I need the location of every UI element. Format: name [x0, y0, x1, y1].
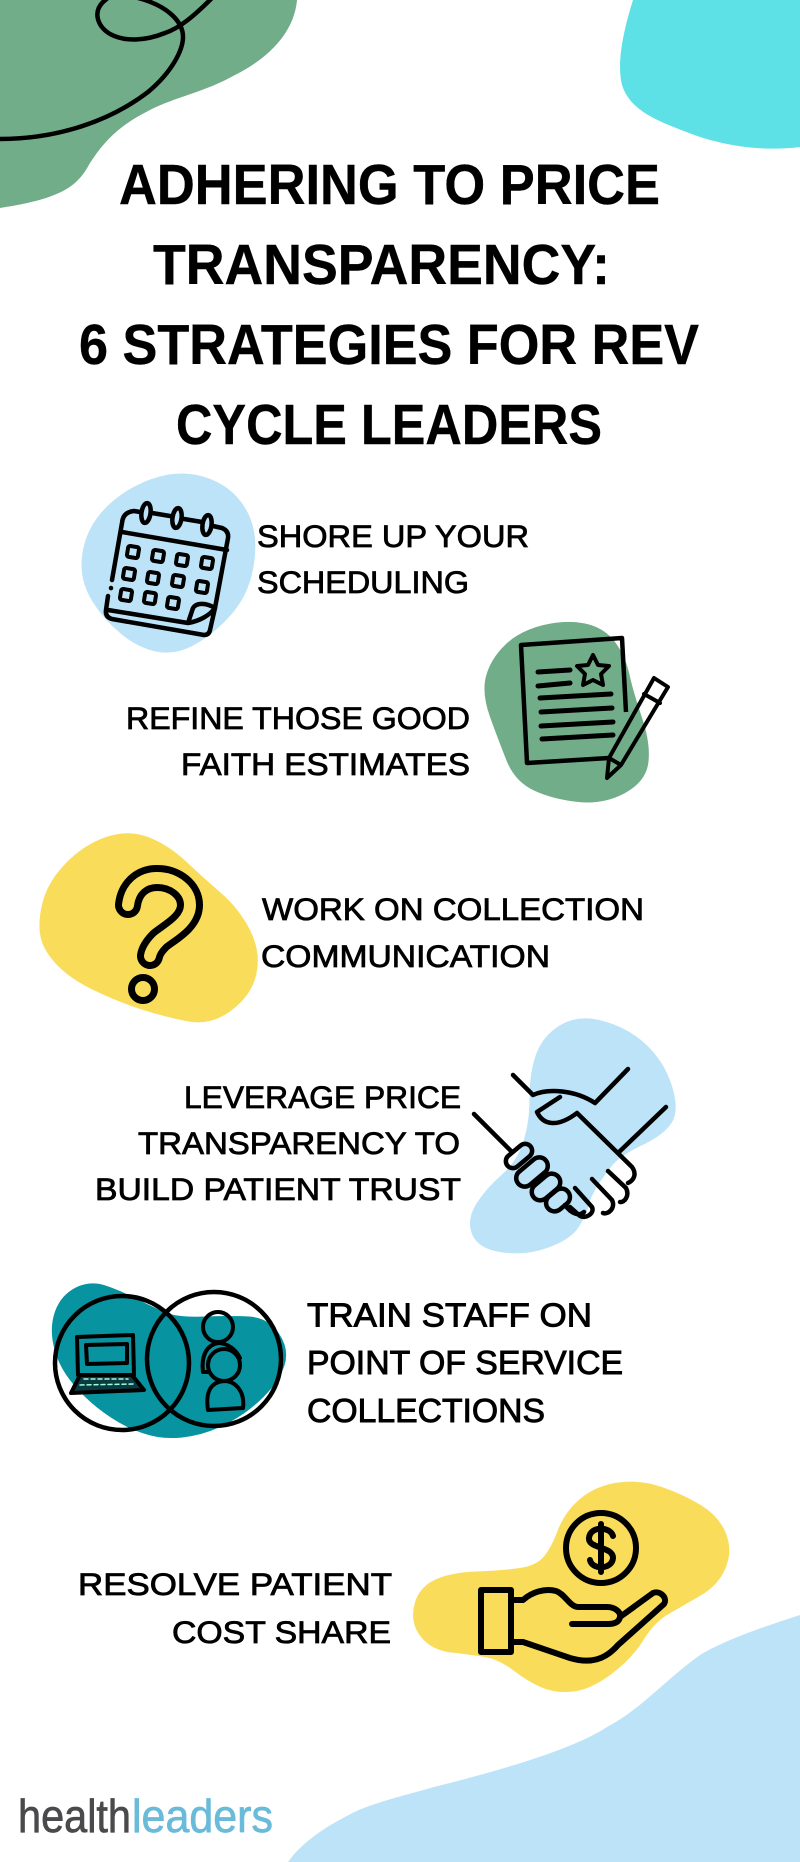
text: leverage price transparency: [95, 1079, 461, 1207]
title: ADHERING TO PRICE: [119, 153, 660, 217]
text: work on collection communication: [261, 891, 644, 974]
text: train staff on point of service collections: [307, 1296, 623, 1429]
logo: healthleaders: [18, 1790, 273, 1842]
icon: document and pencil: [521, 638, 668, 778]
decorative swirl line: [0, 0, 212, 139]
text: train staff on point of service collections: TRAIN STAFF ON: [307, 1296, 592, 1334]
title: 6 STRATEGIES FOR REV: [79, 313, 699, 377]
text: leverage price transparency: BUILD PATIENT TRUST: [95, 1171, 461, 1207]
text: refine those good faith estimates: REFINE THOSE GOOD: [126, 700, 470, 736]
text: resolve patient cost share: COST SHARE: [172, 1614, 391, 1650]
strategy 1: scheduling: [84, 476, 529, 650]
text: leverage price transparency: LEVERAGE PRICE: [184, 1079, 461, 1115]
text: refine those good faith estimates: FAITH ESTIMATES: [181, 746, 470, 782]
title: [79, 153, 699, 457]
text: shore up your scheduling: SHORE UP YOUR: [257, 518, 529, 554]
icon: laptop and people venn circles: [55, 1292, 281, 1430]
text: work on collection communication: WORK ON COLLECTION: [262, 891, 644, 927]
icon backdrop: yellow blob: [42, 836, 255, 1020]
logo: healthleaders: leaders: [132, 1790, 273, 1842]
icon: hand holding coin: [481, 1513, 665, 1661]
decorative blob: cyan top right: [620, 0, 800, 149]
icon: calendar: [106, 502, 228, 635]
icon backdrop: blue blob: [84, 476, 253, 650]
text: refine those good faith estimates: [126, 700, 470, 782]
text: resolve patient cost share: [78, 1566, 392, 1650]
text: train staff on point of service collections: COLLECTIONS: [307, 1392, 545, 1429]
icon backdrop: teal blob: [54, 1286, 284, 1436]
logo: healthleaders: health: [18, 1790, 131, 1842]
icon backdrop: green blob: [487, 624, 646, 800]
text: resolve patient cost share: RESOLVE PATIENT: [78, 1566, 392, 1602]
decorative blob: light blue bottom right: [288, 1615, 800, 1862]
strategy 4: patient trust: [95, 1021, 673, 1251]
text: work on collection communication: COMMUNICATION: [261, 938, 550, 974]
icon backdrop: yellow blob: [416, 1484, 727, 1690]
text: shore up your scheduling: [257, 518, 529, 600]
strategy 6: patient cost share: [78, 1484, 727, 1690]
strategy 2: good faith estimates: [126, 624, 668, 800]
icon backdrop: blue blob: [472, 1021, 673, 1251]
text: leverage price transparency: TRANSPARENCY TO: [138, 1125, 460, 1161]
title: CYCLE LEADERS: [176, 393, 602, 457]
text: train staff on point of service collections: POINT OF SERVICE: [307, 1344, 623, 1381]
decorative blob: green top left: [0, 0, 297, 208]
strategy 3: collection communication: [42, 836, 644, 1020]
icon: question mark: [128, 878, 190, 1000]
icon: handshake: [474, 1069, 666, 1217]
strategy 5: train staff: [54, 1286, 623, 1436]
text: shore up your scheduling: SCHEDULING: [257, 564, 469, 600]
title: TRANSPARENCY:: [153, 233, 610, 297]
